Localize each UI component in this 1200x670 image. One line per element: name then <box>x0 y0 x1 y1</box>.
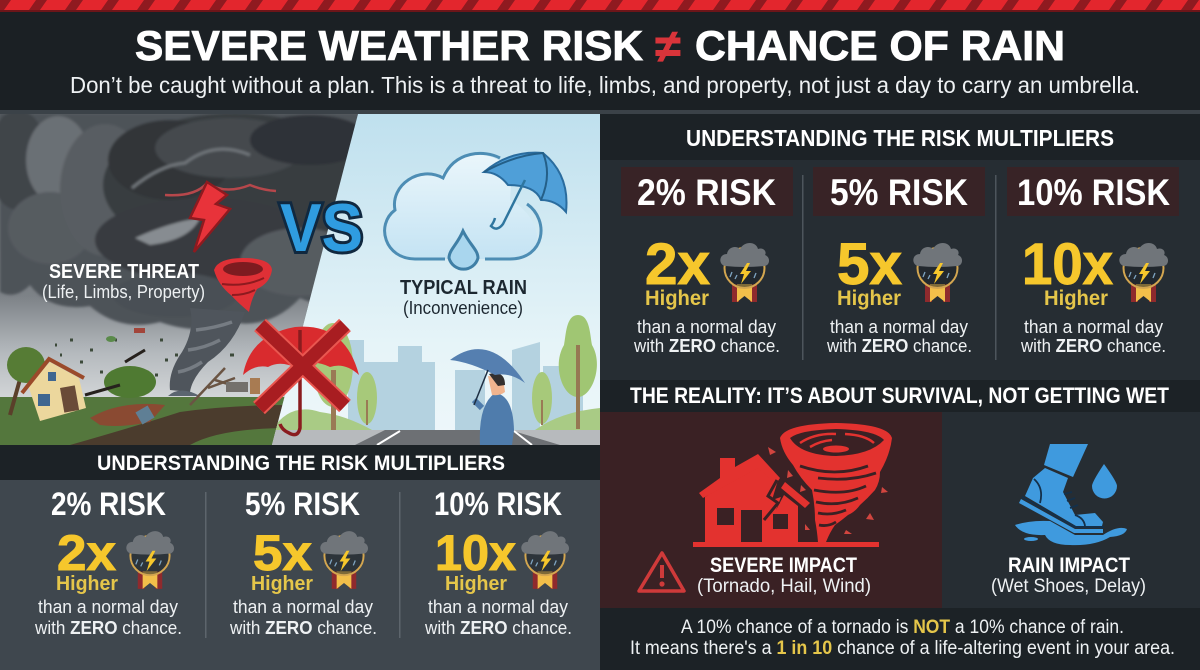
column: 2% risk: 2x <box>645 232 710 297</box>
icon: small red tornado <box>214 258 272 312</box>
column: 2% risk: with ZERO chance. <box>34 618 182 638</box>
conclusion text <box>600 608 1200 670</box>
header band <box>0 0 1200 114</box>
column: 10% risk: with ZERO chance. <box>1020 336 1166 356</box>
column: 2% risk: Higher <box>645 287 709 310</box>
column: 10% risk <box>424 486 572 638</box>
column: 10% risk: Higher <box>1044 287 1108 310</box>
column: 10% risk <box>1007 167 1179 356</box>
column: 5% risk: 5x <box>253 525 312 581</box>
label: rain impact: RAIN IMPACT <box>1008 554 1130 577</box>
tornado funnel <box>168 320 241 396</box>
skyline <box>348 340 583 432</box>
column: 2% risk: 2x <box>57 525 116 581</box>
icon: warning triangle <box>639 553 684 591</box>
label: rain impact: (Wet Shoes, Delay) <box>991 576 1146 597</box>
icon: red umbrella crossed out <box>243 325 359 435</box>
column: 10% risk: with ZERO chance. <box>424 618 572 638</box>
panel: severe threat vs typical rain illustration <box>0 110 600 445</box>
panel: severe impact <box>600 412 942 608</box>
column: 5% risk: Higher <box>251 573 313 595</box>
column: 2% risk: with ZERO chance. <box>633 336 780 356</box>
column: 5% risk: 5x <box>837 232 902 297</box>
panel: the reality <box>600 380 1200 670</box>
person with umbrella <box>450 349 525 445</box>
column: 5% risk <box>813 167 985 356</box>
heading band: UNDERSTANDING THE RISK MULTIPLIERS <box>97 452 505 475</box>
column: 2% risk: than a normal day <box>637 317 776 337</box>
storm cloud <box>0 110 370 329</box>
column: 2% risk <box>34 486 182 638</box>
label: severe impact <box>697 554 871 597</box>
heading band: UNDERSTANDING THE RISK MULTIPLIERS <box>686 125 1114 151</box>
column: 2% risk <box>621 167 793 356</box>
icon: rain cloud <box>385 153 541 269</box>
icon: lightning bolt <box>165 182 276 252</box>
ground <box>0 397 284 445</box>
label: severe threat: SEVERE THREAT <box>49 261 199 283</box>
debris tree left <box>7 347 45 415</box>
storm scene <box>0 110 370 445</box>
icon: blue umbrella <box>484 153 567 229</box>
column: 5% risk: with ZERO chance. <box>826 336 972 356</box>
column: 5% risk: with ZERO chance. <box>229 618 377 638</box>
panel: left risk multipliers <box>0 445 600 670</box>
calm scene <box>270 114 600 445</box>
label: typical rain <box>400 277 527 318</box>
label: rain impact <box>991 554 1146 597</box>
hedges and road <box>272 408 600 430</box>
column: 10% risk: 10x <box>435 525 516 581</box>
panel: right risk multipliers <box>600 114 1200 380</box>
panel: rain impact <box>942 412 1200 608</box>
column: 5% risk: than a normal day <box>233 597 373 617</box>
label: severe threat: (Life, Limbs, Property) <box>42 282 205 302</box>
label: severe impact: SEVERE IMPACT <box>710 554 857 577</box>
label: severe impact: (Tornado, Hail, Wind) <box>697 576 871 597</box>
column: 2% risk: Higher <box>56 573 118 595</box>
label: typical rain: TYPICAL RAIN <box>400 277 527 299</box>
icon: wet shoe in puddle <box>1015 444 1127 545</box>
column: 10% risk: than a normal day <box>1024 317 1163 337</box>
heading band <box>600 114 1200 160</box>
column: 10% risk: than a normal day <box>428 597 568 617</box>
column: 5% risk: than a normal day <box>830 317 968 337</box>
column: 10% risk: 10% RISK <box>1017 172 1170 213</box>
house <box>22 359 86 421</box>
column: 5% risk: 5% RISK <box>830 172 968 213</box>
title: CHANCE OF RAIN <box>695 22 1065 69</box>
column: 2% risk: than a normal day <box>38 597 178 617</box>
column: 5% risk <box>229 486 377 638</box>
conclusion text: It means there's a 1 in 10 chance of a life-altering event in your area. <box>630 638 1175 659</box>
trees <box>313 315 597 430</box>
subtitle: Don’t be caught without a plan. This is a threat to life, limbs, and property, not just a day to carry an umbrella. <box>70 72 1140 98</box>
title <box>135 20 1065 72</box>
icon: tornado destroying house <box>693 423 892 547</box>
column: 2% risk: 2% RISK <box>51 486 166 522</box>
label: typical rain: (Inconvenience) <box>403 298 523 318</box>
column: 10% risk: 10x <box>1022 232 1113 297</box>
heading band <box>0 445 600 480</box>
column: 5% risk: Higher <box>837 287 901 310</box>
column: 5% risk: 5% RISK <box>245 486 360 522</box>
VS badge: VS <box>280 190 363 266</box>
title: ≠ <box>655 20 681 72</box>
debris <box>55 328 260 426</box>
label: severe threat <box>42 261 205 302</box>
column: 10% risk: 10% RISK <box>434 486 562 522</box>
column: 2% risk: 2% RISK <box>637 172 776 213</box>
column: 10% risk: Higher <box>445 573 507 595</box>
conclusion text: A 10% chance of a tornado is NOT a 10% chance of rain. <box>681 617 1124 638</box>
title: SEVERE WEATHER RISK <box>135 22 643 69</box>
